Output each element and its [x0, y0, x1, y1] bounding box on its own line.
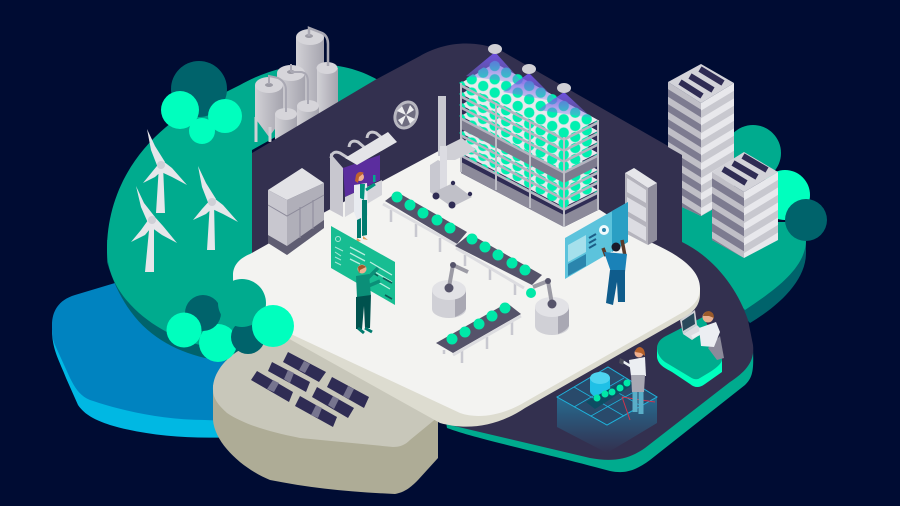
top-left trees [161, 61, 242, 144]
white factory floor [233, 133, 700, 427]
water [52, 280, 250, 438]
short building [712, 152, 778, 258]
wind turbine 2 [193, 166, 238, 250]
wall fan [389, 96, 423, 134]
wind turbine 3 [131, 186, 177, 272]
conveyor 3 [436, 302, 521, 363]
solar panels [251, 352, 369, 427]
vertical farming rack [459, 60, 600, 227]
engineer at blue screen [603, 240, 627, 305]
green edge of factory base [445, 350, 753, 472]
rock top surface [213, 335, 440, 447]
forklift robot [430, 96, 476, 208]
right hill with trees [682, 125, 827, 323]
green data screen [331, 226, 395, 305]
robot arm 2 [526, 278, 569, 335]
lab hood machine [330, 132, 397, 217]
factory dark wall and floor [252, 43, 753, 460]
blue data screen [565, 202, 628, 279]
tall building [668, 64, 734, 216]
bottom-left trees [166, 279, 294, 362]
left hill [107, 64, 378, 365]
silos [255, 28, 338, 144]
rock base side [213, 385, 438, 494]
green desk with analyst [657, 310, 724, 387]
woman with tablet [619, 347, 646, 414]
purple grow lights [466, 44, 592, 118]
illustration: smart vertical farm [52, 26, 827, 494]
hologram conveyor [557, 367, 657, 453]
robot arm 1 [432, 262, 468, 318]
bookshelf [625, 168, 657, 245]
wind turbine 1 [143, 129, 187, 213]
conveyor 2 [455, 234, 542, 295]
scientist [354, 172, 376, 242]
conveyor 1 [383, 192, 467, 252]
engineer at green screen [356, 264, 380, 333]
grey machine cabinet [268, 168, 324, 255]
